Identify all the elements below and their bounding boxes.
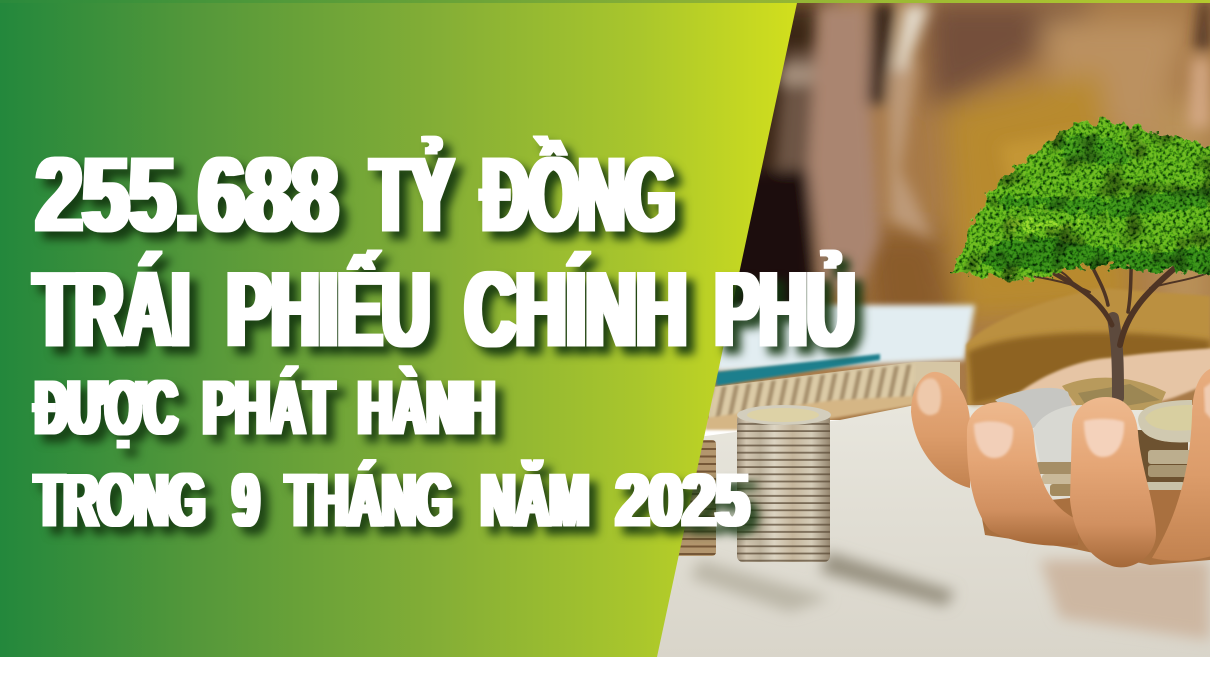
headline: top block — [34, 136, 855, 369]
foliage — [952, 121, 1210, 279]
line 4: period: 9 — [233, 458, 259, 542]
line 1: amount — [36, 136, 675, 254]
hand back — [1010, 348, 1210, 408]
ring finger — [1070, 397, 1156, 567]
little finger — [1152, 368, 1210, 561]
top strip — [0, 0, 1210, 3]
photo: hand holding coins and tree — [640, 0, 1210, 657]
headline: bottom block — [35, 364, 749, 542]
coins in hand — [995, 378, 1192, 496]
trunk and branches — [1033, 265, 1206, 402]
line 3: issued: ĐƯỢC — [35, 365, 177, 451]
line 3: issued — [35, 364, 495, 451]
line 4: period: TRONG — [35, 458, 205, 542]
index finger — [911, 372, 970, 488]
line 4: period: NĂM — [481, 458, 589, 542]
hand — [911, 368, 1210, 567]
blurred shirt backdrop — [708, 3, 1210, 420]
line 1: amount: 255.688 — [36, 136, 338, 254]
line 2: bond label: PHỦ — [715, 249, 855, 369]
line 2: bond label: CHÍNH — [465, 249, 687, 369]
line 4: period: 2025 — [616, 458, 749, 542]
table — [640, 405, 1210, 657]
green gradient panel — [0, 3, 797, 657]
line 2: bond label: TRÁI — [34, 249, 190, 369]
line 2: bond label — [34, 249, 855, 369]
tree — [952, 121, 1210, 398]
line 3: issued: PHÁT — [203, 364, 334, 451]
middle finger — [967, 402, 1078, 546]
line 4: period: THÁNG — [286, 458, 452, 542]
line 2: bond label: PHIẾU — [227, 249, 430, 369]
line 1: amount: TỶ — [371, 136, 453, 254]
line 3: issued: HÀNH — [358, 364, 495, 451]
palm under fingers — [982, 490, 1210, 565]
coin stack shadows — [690, 552, 1210, 640]
line 4: period — [35, 458, 749, 542]
left coin stack — [678, 440, 716, 556]
centre coin stack — [737, 405, 831, 562]
line 1: amount: ĐỒNG — [482, 136, 675, 254]
sleeve — [966, 288, 1210, 405]
notebook — [705, 305, 975, 430]
